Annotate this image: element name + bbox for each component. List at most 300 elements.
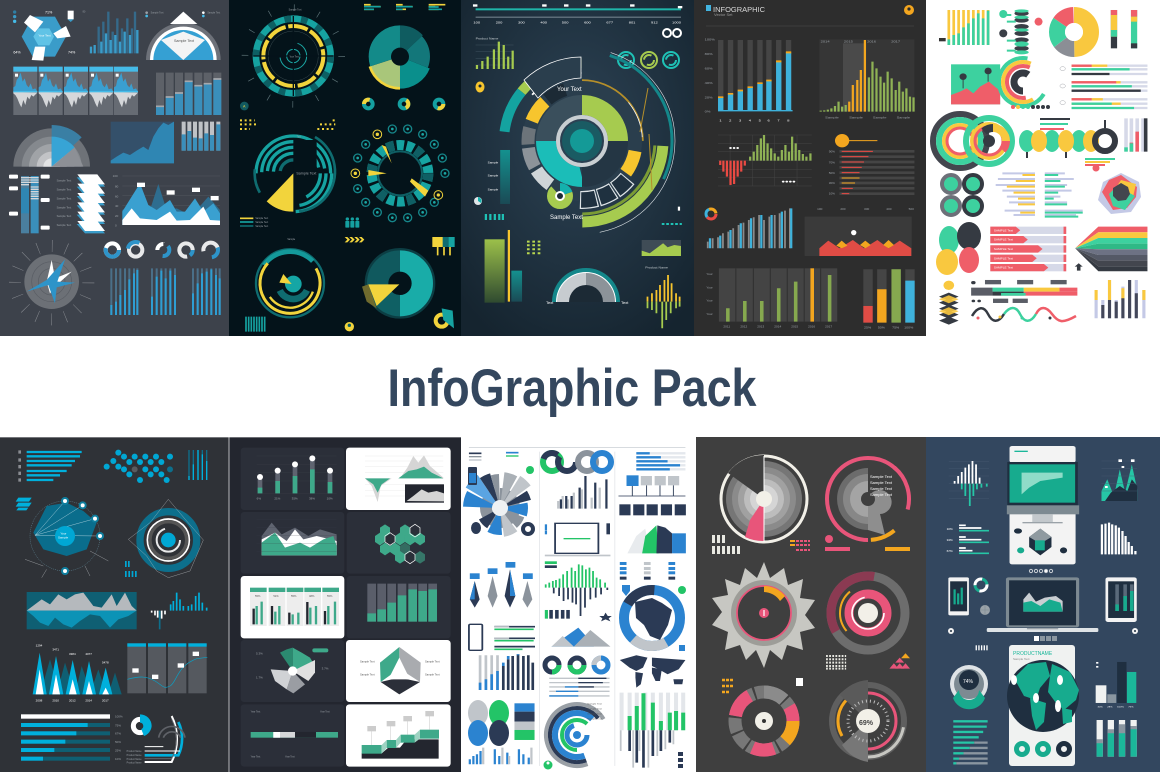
half gauge: Sample Text: [174, 39, 194, 43]
blue column chart: 0%: [705, 110, 711, 114]
green year bars: Your: [706, 299, 713, 302]
panel: cards dashboard: [229, 437, 461, 772]
triangle peaks chart: [33, 644, 122, 702]
blue column chart: 6: [768, 119, 770, 122]
sample text arrow bars: [990, 227, 1066, 271]
triangle peaks chart: 2008: [36, 698, 43, 702]
card: timeline: [241, 704, 344, 767]
value columns right: 75%: [1128, 706, 1135, 708]
timeline bars: 600: [584, 21, 591, 24]
card: timeline: Year Text: [320, 711, 330, 714]
semi radial with pink ring: Sample Text: [870, 480, 893, 485]
layered funnel arrow: [1075, 227, 1147, 271]
gauge ring bottom left: [246, 239, 334, 327]
progress column chart: [156, 73, 221, 115]
horizontal bar groups: [1060, 66, 1147, 108]
card: white grouped bars: 55%: [255, 594, 261, 598]
people row with star: [545, 610, 612, 621]
wide mirror area chart: [27, 592, 137, 629]
green year bars: 2017: [825, 325, 833, 328]
tags and dark columns: [618, 475, 686, 515]
hexagon map: [104, 450, 173, 483]
green and orange frequency bars: Sample: [897, 116, 910, 119]
phone teal bars: [948, 577, 969, 615]
card: green column bars: [347, 576, 451, 638]
small donut icons: [364, 98, 443, 110]
radial ring chart: [125, 499, 203, 578]
white falling bars: [1102, 523, 1135, 554]
hexagon diagram: [13, 10, 76, 61]
outer arc ring: [489, 48, 675, 234]
green and orange frequency bars: 2016: [867, 40, 876, 44]
card: white 3D hex diagram: Sample Text: [425, 672, 440, 676]
blue column chart: 8: [787, 119, 789, 122]
legend list: Sample Text: [587, 703, 602, 705]
teal ring icon: [975, 579, 987, 591]
quarter arc chart: Product Name: [127, 750, 142, 753]
bar chart: blue columns: [83, 12, 137, 53]
small horizontal bars: [549, 678, 610, 696]
laptop screen: [545, 523, 610, 556]
horizontal blue bars: [18, 452, 82, 480]
white mirror bars: [949, 461, 989, 506]
blue column chart: 4: [749, 119, 751, 122]
green navy big column stack: [480, 654, 533, 690]
progress bars list: 75%: [115, 723, 121, 727]
gear burst: [712, 562, 815, 668]
progress list: 30%: [829, 181, 836, 185]
wave line: [972, 308, 1076, 321]
bar chart: blue columns: 80: [83, 12, 86, 14]
panel: graphite blue dashboard bottom left: [0, 437, 229, 772]
mini legend bars: [364, 5, 445, 9]
card: hexagon cluster: [347, 512, 451, 574]
small gauges: [618, 29, 681, 68]
card: white grouped bars: 48%: [309, 594, 315, 598]
timeline bars: 200: [496, 21, 502, 24]
coloured dots row: [1011, 105, 1050, 109]
diverging bars: Product Name: [645, 266, 668, 269]
small bars list: 67%: [947, 549, 953, 553]
semicircle gauge: [546, 268, 629, 305]
semi radial with pink ring: Sample Text: [870, 486, 893, 491]
green ring percents: [942, 175, 982, 215]
triangle peaks chart: 4077: [85, 652, 92, 656]
semicircle gauge: Text: [621, 300, 629, 305]
heading block: INFOGRAPHIC: [713, 5, 766, 14]
spiral donut: [537, 695, 617, 772]
big concentric ring chart: Sample Text: [289, 9, 302, 12]
teal stacked column: [488, 150, 510, 204]
timeline bars: 100: [473, 21, 480, 24]
progress bars list: 67%: [115, 731, 121, 735]
progress bars list: [21, 714, 123, 761]
red area chart: 100: [817, 207, 823, 211]
legend list: Sample Text: [587, 713, 602, 715]
gauge ring bottom left: Sample: [287, 239, 296, 241]
radar chart: [1092, 164, 1141, 214]
radial sector chart: [721, 455, 807, 542]
card: rose diagram: 5.3%: [256, 651, 263, 655]
card: white grouped bars: [241, 576, 344, 638]
fan radial chart: [480, 488, 520, 528]
triangle peaks chart: 5478: [102, 660, 109, 664]
network globe chart: Sample: [58, 536, 68, 540]
heading block: Vector Set: [714, 12, 733, 17]
main radial infographic: [489, 48, 675, 234]
hexagon diagram: Your Text: [38, 34, 51, 38]
small multiples: histogram cards: [13, 67, 138, 115]
positive negative bars: [718, 135, 812, 186]
dots and pyramids: [826, 653, 910, 669]
value columns right: 34%: [1097, 706, 1104, 708]
card: white 3D hex diagram: Sample Text: [360, 672, 375, 676]
big concentric ring chart: [245, 8, 342, 104]
stacked paper layers: Sample Text: [57, 178, 71, 182]
big white rim: [524, 57, 581, 98]
sample text arrow bars: SAMPLE Text: [994, 266, 1013, 269]
legend lines: Sample Text: [255, 217, 268, 220]
colored progress columns: [1126, 118, 1146, 152]
yellow triangle slice: [362, 284, 399, 308]
green and orange frequency bars: 2015: [844, 40, 853, 44]
phone with bars: [469, 624, 535, 650]
layered area chart: 20: [115, 214, 119, 218]
card: white steps: [346, 704, 451, 767]
green and orange frequency bars: 2017: [891, 40, 900, 44]
multi ring donut: [817, 562, 919, 664]
donut row: [106, 241, 220, 259]
blue column chart: 40%: [705, 81, 714, 85]
color progress columns: 100%: [904, 326, 914, 329]
triangle peaks chart: 2017: [102, 698, 109, 702]
quarter arc chart: Product Name: [127, 762, 142, 765]
panel: navy devices dashboard: [926, 437, 1160, 772]
card: green area: [241, 512, 344, 574]
blue column chart: 100%: [705, 38, 716, 42]
heading block: [706, 5, 914, 26]
green year bars: 2011: [723, 325, 731, 328]
vertical blue bars: [189, 450, 207, 480]
progress bars list: 10%: [115, 757, 121, 761]
green year bars: [706, 268, 837, 328]
panel: grey pink radial charts: [696, 437, 926, 772]
card: timeline: Year Text: [251, 711, 261, 714]
small control icons: [948, 628, 1138, 641]
blue column chart: 1: [719, 119, 722, 122]
card: pin column chart: 38%: [309, 496, 315, 500]
card: timeline: Year Text: [251, 756, 261, 759]
legend lines: [240, 217, 268, 228]
blue column chart: 3: [739, 119, 741, 122]
sample text arrow bars: SAMPLE Text: [994, 247, 1013, 251]
card: white 3D hex diagram: Sample Text: [360, 660, 375, 664]
stacked paper layers: Sample Text: [57, 187, 71, 191]
radial half chart: [13, 125, 90, 167]
mini rings row: [545, 658, 608, 672]
value columns right: 28%: [1107, 706, 1114, 708]
area bar chart: [111, 122, 174, 163]
legend list: [587, 703, 602, 720]
timeline bars: 1000: [672, 21, 681, 24]
green tall gradient bars: [485, 230, 540, 303]
network globe chart: Your: [60, 532, 66, 536]
pie chart with yellow wedge: [368, 25, 432, 88]
diverging bars: [645, 266, 680, 328]
radial bars with yellow wedge: Sample Text: [296, 171, 316, 175]
spider star chart: [15, 246, 88, 319]
semicircle gauge: Text: [546, 300, 554, 305]
network globe chart: [16, 497, 108, 578]
timeline bars: [473, 4, 682, 24]
donut pair icons: [540, 450, 611, 474]
rising blue bars: [708, 208, 791, 248]
layered area chart: 100: [113, 174, 118, 178]
corner icons: [345, 308, 454, 331]
layered area chart: 0: [115, 224, 117, 228]
card: pin column chart: [241, 448, 344, 510]
desktop monitor screen: [1007, 446, 1079, 564]
progress bars list: 25%: [115, 748, 121, 752]
blue column chart: 60%: [705, 67, 714, 70]
color progress columns: 25%: [864, 326, 871, 329]
triangle peaks chart: 2010: [52, 698, 59, 702]
stacked paper layers: Sample Text: [57, 196, 71, 200]
half gauge: Sample Text: [151, 11, 164, 14]
small bars list: 10%: [947, 527, 953, 531]
donut icon: [133, 714, 152, 736]
green and orange frequency bars: [819, 39, 914, 119]
yellow badge and icon markers: [474, 82, 484, 205]
triangle peaks chart: 3471: [52, 648, 59, 652]
teal stacked column: Sample: [488, 188, 499, 191]
stacked vertical columns: [1111, 10, 1137, 48]
laptop: [987, 577, 1098, 632]
color progress columns: [864, 269, 914, 329]
value columns right: 100%: [1117, 706, 1125, 708]
blue column chart: 5: [759, 119, 761, 122]
legend list: Sample Text: [587, 708, 602, 710]
four card line chart: [127, 643, 207, 693]
green year bars: Your: [706, 272, 713, 276]
green navy big bars bottom right: [621, 693, 683, 768]
green and orange frequency bars: Sample: [873, 116, 887, 119]
layered area chart: 40: [115, 204, 119, 208]
red area chart: 300: [864, 207, 870, 211]
world donut: [614, 580, 690, 656]
teal dark area: [1101, 459, 1137, 501]
timeline bars: 677: [606, 21, 613, 24]
stacked paper layers: [57, 174, 105, 233]
green yellow bars: [939, 10, 988, 45]
sample text arrow bars: SAMPLE Text: [994, 229, 1013, 232]
timeline bars: 300: [518, 21, 525, 24]
green bar chart: [476, 37, 514, 69]
grey globe icon: [980, 605, 990, 615]
corner icons: [544, 754, 683, 770]
gauge ring product: [826, 679, 910, 763]
product card with globe: [1007, 645, 1079, 766]
triangle mountains: [552, 628, 610, 647]
half gauge: [145, 11, 221, 60]
sample text arrow bars: SAMPLE Text: [994, 238, 1013, 241]
stacked paper layers: Sample Text: [57, 205, 71, 209]
title: InfoGraphic Pack: [388, 359, 757, 418]
layered area chart: 80: [115, 184, 119, 188]
header and legend: [469, 447, 685, 766]
yellow dot grids: [240, 120, 335, 129]
semi radial with pink ring: Sample Text: [870, 474, 893, 479]
spike pins: [470, 562, 533, 608]
people and dots row: [486, 207, 682, 224]
quarter arc chart: [127, 716, 185, 765]
timeline bars: 801: [629, 21, 635, 24]
vertical gauges with labels: [9, 175, 50, 233]
card: rose diagram: 3.7%: [322, 666, 329, 670]
layered area chart: 60: [115, 194, 119, 198]
card: white 3D hex diagram: [346, 640, 451, 702]
petal labels: [468, 700, 509, 746]
red area chart: 500: [909, 207, 914, 211]
panel: white blue green charts: [461, 437, 696, 772]
radial bars with yellow wedge: [240, 117, 350, 226]
pager dots: [1029, 569, 1053, 573]
green year bars: 2013: [757, 325, 765, 328]
blue column chart: 2: [729, 119, 731, 122]
panel: charcoal charts: [694, 0, 926, 336]
progress columns with sliders: [1100, 720, 1134, 757]
green year bars: 2012: [740, 325, 748, 328]
panel: white colourful charts: [926, 0, 1160, 336]
sample text arrow bars: SAMPLE Text: [994, 257, 1013, 260]
ring icons left: [468, 466, 534, 534]
main radial infographic: Your Text: [557, 87, 582, 93]
color progress columns: 50%: [878, 326, 885, 329]
progress list: 90%: [829, 150, 836, 153]
card: pin column chart: 21%: [274, 496, 281, 500]
layered area chart: [113, 174, 220, 228]
chevron arrows: [345, 237, 364, 242]
bubble timeline: [1019, 119, 1115, 165]
product card with globe: Sample Text: [1013, 657, 1030, 661]
semi radial with pink ring: Sample Text: [870, 492, 893, 497]
badge A: [240, 102, 249, 110]
panel: dark teal dashboard: [229, 0, 461, 336]
concentric rainbow circles: [933, 114, 1012, 168]
progress list: [829, 134, 914, 195]
radial percent: 74%: [963, 679, 974, 685]
chevron tower: [939, 281, 959, 325]
green and orange frequency bars: 2014: [821, 40, 830, 44]
pink area with pins: [951, 64, 1000, 104]
card: rose diagram: 1.7%: [256, 676, 263, 680]
area thumbnail: [642, 240, 681, 256]
timeline bars: 500: [562, 21, 568, 24]
small bars list: 34%: [947, 538, 953, 542]
semi radial with pink ring: [810, 441, 926, 557]
horizontal ladder bars: [953, 721, 988, 763]
red area chart: [805, 207, 914, 256]
hexagon diagram: 71%: [45, 10, 53, 14]
triangle peaks chart: 3384: [69, 652, 76, 656]
panel: navy radial dashboard: [461, 0, 694, 336]
orange blue ring icon: [706, 209, 716, 219]
bottom blue mini columns: [470, 748, 531, 764]
green bar chart: Product Name: [476, 37, 499, 40]
stacked discs column: [999, 9, 1043, 54]
red area chart: 400: [886, 207, 892, 211]
pie bubble: [554, 190, 566, 202]
card: white grouped bars: 51%: [273, 594, 279, 598]
hexagon diagram: 74%: [68, 50, 76, 54]
small mirror bars: [152, 593, 207, 629]
people icons: [712, 535, 740, 554]
red area chart: 200: [840, 207, 846, 211]
sectors ring: [722, 678, 804, 761]
bars with line: [558, 476, 606, 509]
green navy butterfly columns: [545, 561, 607, 616]
legend lines: Sample Text: [255, 221, 268, 224]
people icons: [345, 217, 359, 228]
triangle peaks chart: 1294: [36, 644, 43, 648]
half gauge: Sample Text: [207, 11, 220, 14]
timeline bars: 912: [651, 21, 658, 24]
card: pin column chart: 35%: [292, 496, 298, 500]
hexagon diagram: 64%: [13, 50, 21, 54]
badge A: A: [243, 104, 246, 108]
card: white mirror area: [346, 448, 451, 510]
color progress columns: 75%: [892, 326, 899, 329]
card: timeline: Year Text: [285, 756, 295, 759]
legend list: Sample Text: [587, 718, 602, 720]
green year bars: 2015: [791, 325, 799, 328]
radial bars with yellow wedge: Text: [297, 135, 301, 138]
circular ring with bubbles: [351, 125, 449, 222]
quarter arc chart: Product Name: [127, 754, 142, 757]
card: rose diagram: [241, 640, 344, 702]
blue column chart: [705, 38, 793, 122]
donut with yellow half: [1057, 15, 1091, 49]
horizontal list bars right: [636, 453, 685, 469]
hump chart: [627, 525, 686, 553]
legend lines: Sample Text: [255, 225, 268, 228]
card: white grouped bars: 55%: [327, 594, 333, 598]
butterfly bars: [996, 173, 1083, 217]
small bars list: [947, 525, 989, 553]
flag stack: [514, 703, 535, 740]
progress list: 10%: [829, 192, 836, 195]
card: pin column chart: 6%: [257, 496, 261, 500]
green year bars: 2014: [774, 325, 782, 328]
quarter arc chart: Product Name: [127, 758, 142, 761]
world map: [620, 655, 685, 688]
title band: [0, 336, 1160, 437]
stacked paper layers: Sample Text: [57, 223, 71, 227]
green and orange frequency bars: Sample: [825, 116, 839, 119]
gauge ring product: 69%: [859, 720, 874, 727]
four leaf petals: [936, 222, 981, 275]
stacked mini columns: [184, 122, 218, 151]
timeline bars: 400: [540, 21, 547, 24]
yellow callout tags: [432, 237, 455, 255]
progress bars list: 50%: [115, 740, 121, 744]
triangle peaks chart: 2012: [69, 698, 76, 702]
green year bars: Your: [706, 286, 713, 289]
radial percent: [950, 665, 988, 709]
green year bars: 2016: [808, 325, 816, 328]
pink and orange legend tags: [790, 535, 910, 551]
blue column chart: 80%: [705, 52, 714, 56]
